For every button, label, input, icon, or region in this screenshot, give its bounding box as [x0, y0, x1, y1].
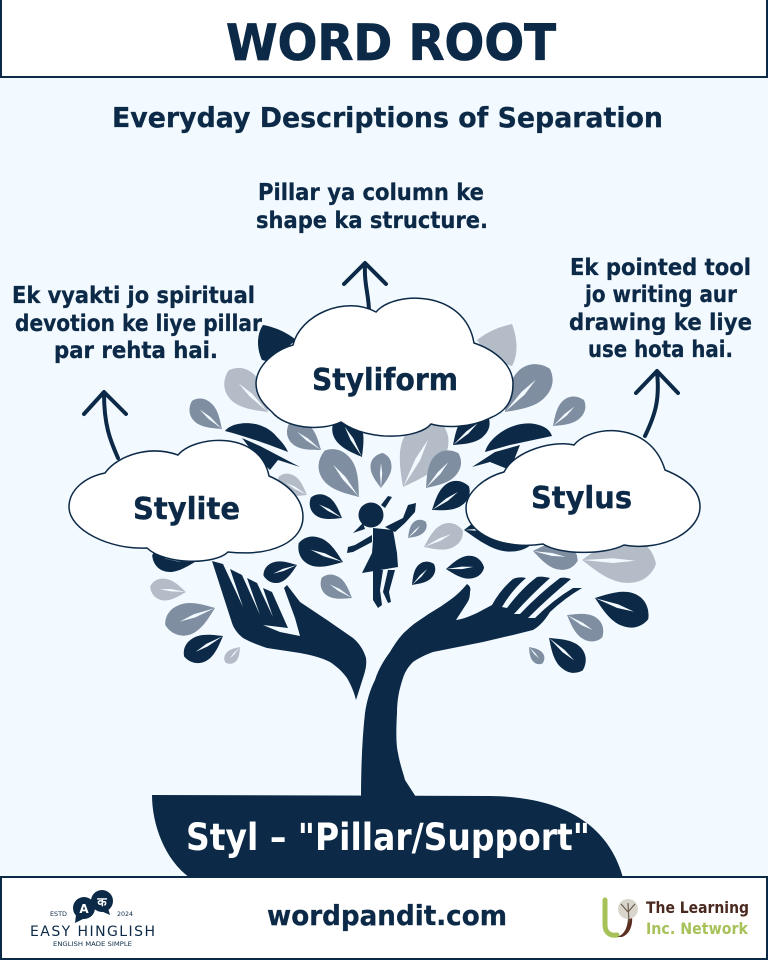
cloud: Stylite: Stylite [133, 492, 240, 527]
logo: The Learning Inc. Network [605, 898, 749, 938]
child silhouette [347, 496, 416, 608]
cloud: Stylite [69, 440, 303, 561]
logo: Easy Hinglish: ENGLISH MADE SIMPLE [53, 941, 132, 948]
logo: Easy Hinglish [30, 890, 155, 948]
arrow: top [344, 263, 386, 312]
definition: Styliform: Pillar ya column ke [258, 180, 484, 206]
definition: Styliform: shape ka structure. [256, 208, 488, 234]
definition: Stylus: Ek pointed tool [570, 255, 751, 281]
definition: Stylite: devotion ke liye pillar [15, 311, 263, 337]
cloud: Styliform [256, 298, 513, 436]
definition: Stylite: par rehta hai. [54, 338, 218, 364]
left hand [212, 561, 366, 700]
definition: Styliform [256, 180, 488, 234]
cloud: Styliform: Styliform [312, 363, 458, 398]
logo: Easy Hinglish: क [96, 895, 107, 909]
footer bar [1, 877, 767, 959]
logo: The Learning Inc. Network: The Learning [646, 898, 749, 917]
definition: Stylite [12, 283, 263, 364]
root label: Styl – "Pillar/Support" [186, 816, 590, 859]
logo: Easy Hinglish: ESTD [50, 911, 67, 918]
logo: Easy Hinglish: EASY HINGLISH [30, 924, 155, 940]
logo: The Learning Inc. Network: Inc. Network [646, 919, 748, 938]
logo: Easy Hinglish: 2024 [117, 911, 133, 918]
definition: Stylus: jo writing aur [584, 282, 738, 308]
subtitle: Everyday Descriptions of Separation [112, 101, 663, 134]
header banner [1, 0, 767, 77]
trunk and right hand [361, 577, 582, 810]
cloud: Stylus: Stylus [531, 481, 632, 516]
definition: Stylus [569, 255, 752, 363]
ground mound [152, 795, 623, 878]
arrow: right [636, 371, 678, 436]
website: wordpandit.com [267, 899, 507, 932]
definition: Stylite: Ek vyakti jo spiritual [12, 283, 255, 309]
tree leaves [149, 324, 656, 680]
arrow: left [84, 392, 126, 458]
definition: Stylus: drawing ke liye [569, 310, 752, 336]
definition: Stylus: use hota hai. [588, 337, 733, 363]
title: WORD ROOT [226, 14, 556, 72]
cloud: Stylus [466, 431, 700, 552]
logo: Easy Hinglish: A [79, 902, 89, 916]
